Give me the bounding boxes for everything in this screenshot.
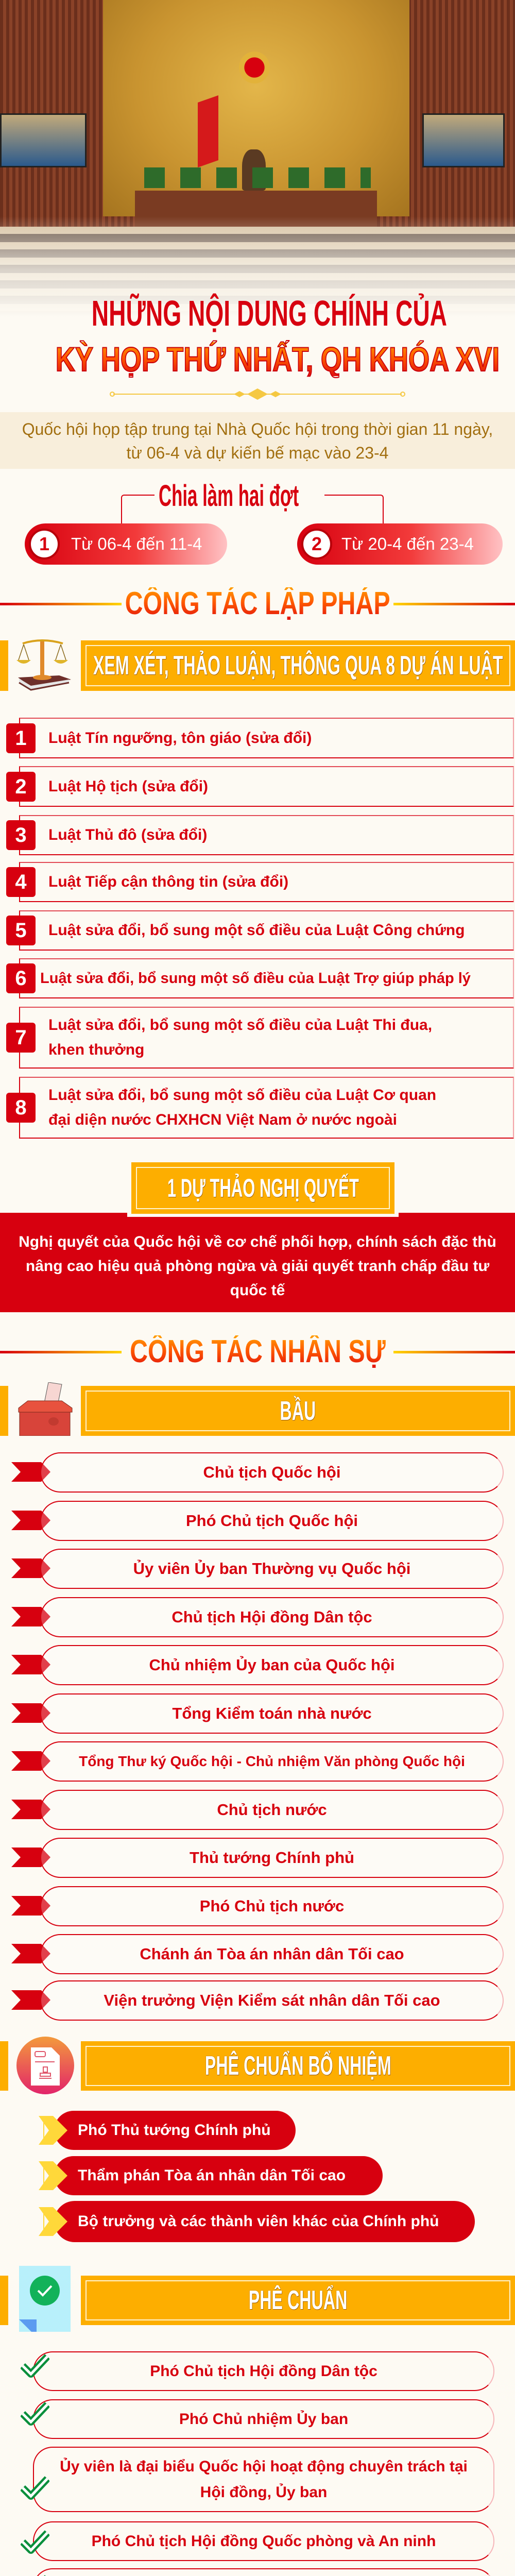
approve 3: Ủy viên là đại biểu Quốc hội hoạt động chuyên trách tại [60, 2458, 468, 2475]
appoint 3 [39, 2201, 475, 2242]
law 7: Luật sửa đổi, bổ sung một số điều của Luật Thi đua, [48, 1016, 432, 1033]
approve 3 [21, 2447, 494, 2512]
law 1 [19, 718, 514, 758]
approve 1 [21, 2351, 494, 2391]
approve 2: Phó Chủ nhiệm Ủy ban [179, 2411, 348, 2428]
law 6: Luật sửa đổi, bổ sung một số điều của Luật Trợ giúp pháp lý [40, 970, 471, 987]
approve 4: Phó Chủ tịch Hội đồng Quốc phòng và An ninh [92, 2533, 436, 2550]
appoint 1 [39, 2111, 296, 2150]
law 7: 7 [15, 1026, 27, 1049]
law 1: Luật Tín ngưỡng, tôn giáo (sửa đổi) [48, 730, 312, 746]
header photo: National Assembly hall [0, 0, 515, 304]
title [56, 293, 500, 378]
elect 8 [11, 1790, 504, 1830]
law 5: 5 [15, 919, 27, 942]
elect 4: Chủ tịch Hội đồng Dân tộc [171, 1608, 372, 1626]
law 4: 4 [15, 871, 27, 893]
appoint 2 [39, 2156, 383, 2195]
elect 5: Chủ nhiệm Ủy ban của Quốc hội [149, 1656, 395, 1674]
pill: session 1 [25, 523, 227, 565]
pill: session 1: Từ 06-4 đến 11-4 [71, 534, 202, 553]
banner: Phê chuẩn [0, 2266, 515, 2332]
law 1: 1 [15, 726, 27, 749]
banner: 8 draft laws: XEM XÉT, THẢO LUẬN, THÔNG QUA 8 DỰ ÁN LUẬT [93, 651, 503, 681]
pill: session 1: 1 [39, 533, 49, 554]
red box with resolution text: nâng cao hiệu quả phòng ngừa và giải quyết tranh chấp đầu tư [26, 1258, 489, 1275]
banner: Bầu: BẦU [280, 1396, 316, 1426]
approve 4 [21, 2521, 494, 2561]
red box with resolution text [0, 1213, 515, 1312]
list: 8 draft laws [6, 718, 514, 1139]
law 6 [19, 958, 514, 998]
law 8: đại diện nước CHXHCN Việt Nam ở nước ngoài [48, 1111, 397, 1128]
icon: approved document with check [19, 2266, 71, 2332]
icon: calendar [154, 482, 155, 509]
pill: session 2 [297, 523, 503, 565]
subtitle band [0, 412, 515, 469]
elect 11: Chánh án Tòa án nhân dân Tối cao [140, 1945, 404, 1963]
red box with resolution text: quốc tế [230, 1282, 285, 1299]
red box with resolution text: Nghị quyết của Quốc hội về cơ chế phối hợp, chính sách đặc thù [19, 1233, 496, 1250]
subtitle band: Quốc hội họp tập trung tại Nhà Quốc hội trong thời gian 11 ngày, [22, 420, 493, 438]
label: 1 draft resolution: 1 DỰ THẢO NGHỊ QUYẾT [167, 1174, 358, 1202]
elect 3 [11, 1549, 504, 1589]
elect 10: Phó Chủ tịch nước [200, 1897, 344, 1915]
law 8: 8 [15, 1096, 27, 1119]
elect 9 [11, 1838, 504, 1878]
ornament divider [110, 388, 405, 400]
elect 2 [11, 1501, 504, 1541]
law 2: Luật Hộ tịch (sửa đổi) [48, 778, 208, 794]
banner: 8 draft laws [0, 639, 515, 691]
law 3: 3 [15, 824, 27, 846]
law 7: khen thưởng [48, 1041, 144, 1058]
law 3 [19, 815, 514, 855]
icon: stamped document [16, 2037, 74, 2094]
section heading: Công tác nhân sự [0, 1335, 515, 1368]
appoint 2: Thẩm phán Tòa án nhân dân Tối cao [78, 2167, 346, 2184]
pill: session 2: Từ 20-4 đến 23-4 [341, 534, 474, 553]
approve 3: Hội đồng, Ủy ban [200, 2483, 327, 2501]
elect 6 [11, 1693, 504, 1734]
law 2: 2 [15, 775, 27, 798]
approve 1: Phó Chủ tịch Hội đồng Dân tộc [150, 2363, 377, 2380]
elect 4 [11, 1597, 504, 1637]
law 6: 6 [15, 967, 27, 990]
subtitle band: từ 06-4 và dự kiến bế mạc vào 23-4 [127, 444, 388, 462]
pill: session 2: 2 [312, 533, 322, 554]
section heading: Công tác lập pháp [0, 587, 515, 620]
law 4: Luật Tiếp cận thông tin (sửa đổi) [48, 873, 288, 890]
law 8 [19, 1077, 514, 1139]
elect 2: Phó Chủ tịch Quốc hội [186, 1512, 358, 1530]
banner: Phê chuẩn bổ nhiệm [0, 2037, 515, 2094]
heading: Chia làm hai đợt: Chia làm hai đợt [159, 479, 299, 512]
label: 1 draft resolution [127, 1159, 399, 1217]
banner: Bầu [0, 1382, 515, 1436]
elect 12 [11, 1980, 504, 2021]
elect 12: Viện trưởng Viện Kiểm sát nhân dân Tối cao [104, 1991, 440, 2009]
elect 1 [11, 1452, 504, 1493]
title line 2: KỲ HỌP THỨ NHẤT, QH KHÓA XVI [56, 340, 500, 378]
law 2 [19, 766, 514, 807]
law 8: Luật sửa đổi, bổ sung một số điều của Luật Cơ quan [48, 1087, 436, 1104]
elect 8: Chủ tịch nước [217, 1801, 327, 1819]
title line 1: NHỮNG NỘI DUNG CHÍNH CỦA [92, 293, 447, 333]
list: appointment approvals [39, 2111, 475, 2242]
law 5: Luật sửa đổi, bổ sung một số điều của Luật Công chứng [48, 922, 465, 939]
law 7 [19, 1007, 514, 1069]
draft resolution block [0, 1162, 515, 1312]
approve 2 [21, 2399, 494, 2439]
law 4 [19, 862, 514, 902]
law 5 [19, 910, 514, 951]
two sessions block [25, 479, 503, 565]
elect 5 [11, 1645, 504, 1685]
elect 7 [11, 1741, 504, 1782]
appoint 1: Phó Thủ tướng Chính phủ [78, 2122, 271, 2139]
elect 7: Tổng Thư ký Quốc hội - Chủ nhiệm Văn phòng Quốc hội [79, 1753, 465, 1769]
appoint 3: Bộ trưởng và các thành viên khác của Chính phủ [78, 2213, 439, 2230]
elect 11 [11, 1934, 504, 1974]
elect 1: Chủ tịch Quốc hội [203, 1463, 340, 1481]
banner: Phê chuẩn bổ nhiệm: PHÊ CHUẨN BỔ NHIỆM [205, 2051, 391, 2081]
elect 10 [11, 1886, 504, 1926]
elect 6: Tổng Kiểm toán nhà nước [172, 1704, 372, 1722]
elect 9: Thủ tướng Chính phủ [190, 1849, 354, 1867]
icon: scales of justice on book [16, 639, 71, 691]
approve 5 [0, 2568, 515, 2576]
law 3: Luật Thủ đô (sửa đổi) [48, 826, 207, 843]
list: approvals [21, 2351, 494, 2576]
elect 3: Ủy viên Ủy ban Thường vụ Quốc hội [133, 1560, 410, 1578]
banner: Phê chuẩn: PHÊ CHUẨN [249, 2285, 347, 2315]
icon: ballot box [19, 1382, 72, 1436]
list: elected positions [11, 1452, 504, 2021]
